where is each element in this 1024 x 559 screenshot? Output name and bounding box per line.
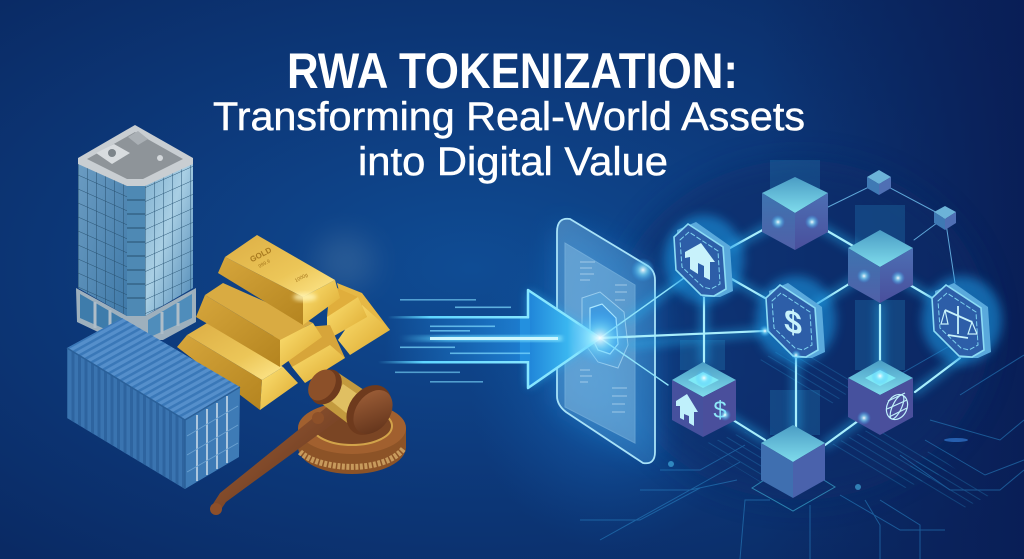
icon: gold bars stack: 999.9 — [258, 258, 272, 270]
cube: top — [762, 177, 828, 250]
token: scales — [922, 276, 1002, 364]
link core — [600, 222, 960, 445]
gavel head right end — [337, 376, 401, 444]
arrow head — [528, 290, 600, 388]
tablet glow — [557, 225, 655, 457]
cube: upper right — [848, 230, 913, 303]
icon: wooden gavel — [210, 363, 406, 515]
thin network lines — [826, 182, 955, 283]
building roof — [78, 125, 193, 186]
glow behind gold — [315, 234, 375, 290]
gavel handle — [211, 402, 345, 514]
icon: glass office building — [76, 125, 196, 340]
middle bar — [205, 283, 313, 340]
small nodes — [867, 170, 956, 230]
icon: balance scales — [941, 306, 977, 338]
container doors — [185, 387, 240, 489]
title line 2: Transforming Real-World Assets — [213, 95, 805, 139]
token: dollar — [756, 276, 836, 364]
cube: globe — [848, 360, 913, 435]
icon: blue shipping container — [67, 318, 240, 489]
title line 3: into Digital Value — [358, 140, 668, 184]
light columns — [680, 160, 905, 435]
building center column — [127, 185, 145, 316]
cube: bottom center — [761, 425, 825, 498]
icon: house on cube — [676, 394, 698, 426]
top bar — [225, 235, 335, 297]
arrow shaft outlines — [388, 316, 529, 318]
arrow glow — [528, 290, 600, 388]
building right face — [145, 160, 193, 316]
gavel head left flange — [304, 363, 348, 411]
icon: globe — [882, 391, 912, 423]
icon: dollar on cube: $ — [713, 397, 727, 424]
title line 1: RWA TOKENIZATION: — [287, 43, 738, 99]
gavel sound block — [298, 420, 406, 474]
tablet hexagon token — [582, 292, 628, 368]
building ground floor — [76, 288, 196, 340]
circuit traces — [580, 340, 1024, 559]
cube: house and dollar — [672, 362, 736, 437]
gold bar engraving: GOLD — [249, 245, 273, 264]
icon: gold bars stack: 1000g — [294, 272, 309, 284]
icon: dollar sign: $ — [784, 301, 802, 343]
motion streaks — [395, 299, 530, 383]
container side — [67, 348, 185, 489]
network links — [600, 182, 960, 445]
icon: house — [685, 243, 715, 280]
arrow shaft — [385, 317, 530, 362]
lower right bar — [270, 325, 345, 367]
gold sparkle — [293, 293, 317, 301]
gavel head gold band — [314, 372, 382, 434]
second far bar — [327, 285, 367, 317]
link glow — [628, 222, 960, 445]
tablet data text marks — [580, 262, 627, 412]
container top — [67, 318, 240, 420]
far right bar — [337, 283, 390, 333]
tablet edge highlight — [631, 258, 655, 282]
building left face — [78, 163, 127, 316]
tablet body — [557, 219, 655, 463]
arrow with motion streaks — [378, 290, 600, 388]
rooftop units — [96, 144, 130, 164]
icon: gold bars stack — [177, 234, 390, 410]
token: house — [664, 215, 744, 303]
light hot spots — [572, 215, 905, 425]
tablet screen — [565, 243, 635, 443]
glass tablet panel — [557, 219, 655, 463]
lower bar — [187, 323, 283, 380]
title — [213, 43, 805, 184]
